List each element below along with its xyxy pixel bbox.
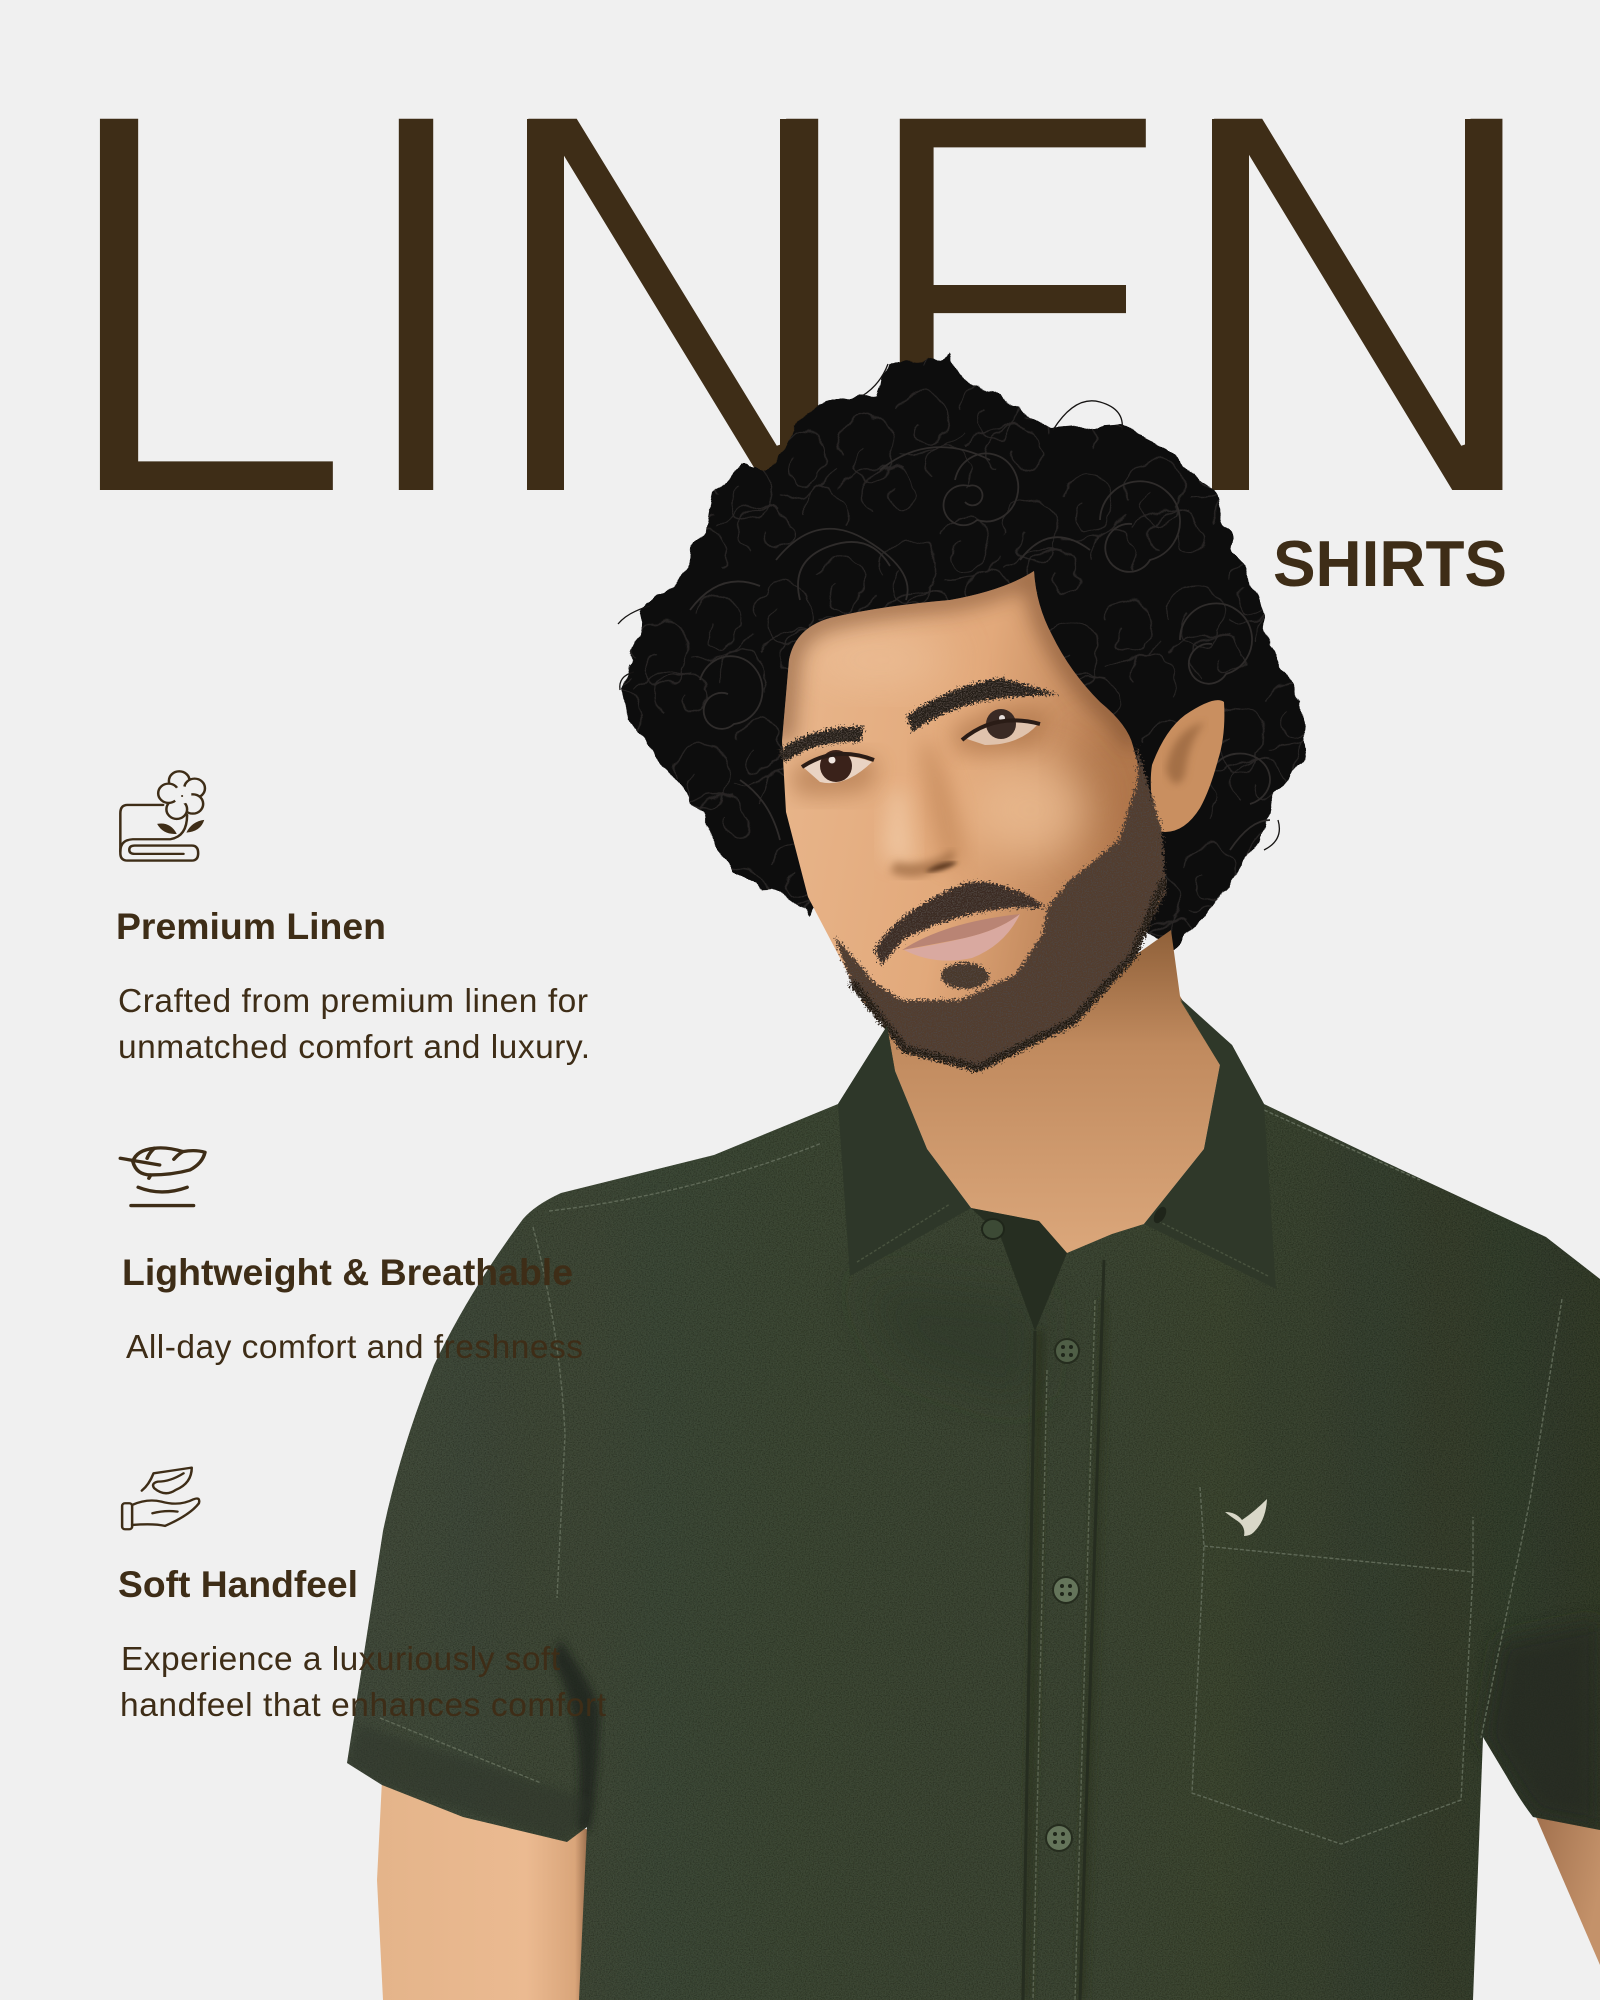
buttons <box>982 1219 1079 1851</box>
heading: Lightweight & Breathable <box>122 1252 573 1293</box>
title: LINEN <box>47 0 1553 616</box>
seams <box>380 1110 1562 1844</box>
description <box>118 983 590 1066</box>
title: LINEN: N <box>1163 0 1553 616</box>
hair back silhouette <box>618 354 1308 949</box>
heading: Premium Linen <box>116 906 386 947</box>
right collar <box>1144 998 1276 1289</box>
eyebrows <box>778 678 1058 762</box>
title: LINEN: L <box>47 0 358 616</box>
feature: Lightweight & Breathable <box>120 1148 583 1366</box>
chin patch <box>941 963 989 989</box>
description: handfeel that enhances comfort <box>120 1687 607 1724</box>
nose shadow <box>890 850 958 877</box>
title: LINEN: E <box>853 0 1183 616</box>
feature: Soft Handfeel <box>118 1468 607 1724</box>
right arm <box>1533 1810 1600 1965</box>
title: LINEN: I <box>346 0 486 616</box>
placket <box>1023 1260 1104 2000</box>
icon: hand with leaf <box>122 1468 199 1529</box>
beard <box>834 745 1166 1070</box>
description: unmatched comfort and luxury. <box>118 1029 590 1066</box>
eyes <box>802 709 1040 783</box>
description: All-day comfort and freshness <box>126 1329 583 1366</box>
icon: feather <box>120 1148 205 1206</box>
feature: Premium Linen <box>116 771 590 1066</box>
stray hair wisps <box>618 364 1279 850</box>
subtitle: SHIRTS: SHIRTS <box>1273 527 1507 600</box>
lips <box>902 914 1020 961</box>
description <box>120 1641 607 1724</box>
description: Experience a luxuriously soft <box>121 1641 561 1678</box>
face <box>782 571 1162 1003</box>
person photo: model in olive linen shirt <box>340 354 1600 2000</box>
moustache <box>874 882 1046 965</box>
sleeve shading <box>1483 1620 1600 1830</box>
icon: towel with flower <box>120 771 205 861</box>
shirt logo <box>1225 1499 1267 1536</box>
heading: Soft Handfeel <box>118 1564 358 1605</box>
left arm <box>377 1780 590 2000</box>
shirt body <box>340 990 1600 2000</box>
left collar <box>838 1026 971 1276</box>
description: Crafted from premium linen for <box>118 983 588 1020</box>
title: LINEN: N <box>477 0 869 616</box>
neck <box>860 930 1220 1260</box>
ear <box>1151 700 1224 832</box>
